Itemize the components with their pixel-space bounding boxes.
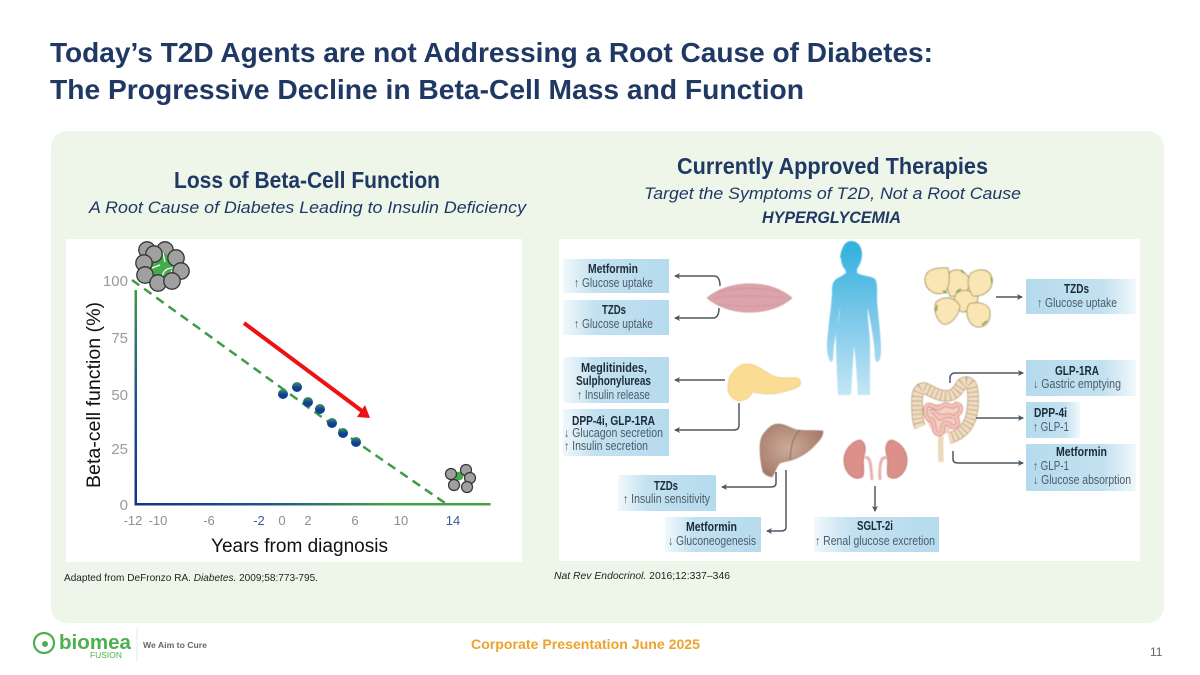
logo: biomea fusion: We Aim to Cure xyxy=(143,641,208,650)
y tick labels: 50 xyxy=(111,387,128,404)
y axis title: Beta-cell function (%) xyxy=(84,302,105,488)
y tick labels: 0 xyxy=(120,497,128,514)
box: metformin liver: Metformin xyxy=(686,520,737,534)
logo: biomea fusion: biomea xyxy=(59,631,132,654)
footer text: Corporate Presentation June 2025 xyxy=(471,636,700,652)
icon: pancreas xyxy=(728,364,801,401)
arrow: gut to GLP-1RA xyxy=(950,373,1023,383)
box: TZDs muscle xyxy=(563,300,669,335)
box: GLP-1RA gut xyxy=(1026,360,1136,396)
y axis xyxy=(134,290,137,505)
panel: content background xyxy=(51,131,1164,623)
chart: beta-cell function decline xyxy=(66,239,522,562)
box: metformin muscle xyxy=(563,259,669,293)
box: DPP-4i gut: ↑ GLP-1 xyxy=(1033,420,1069,434)
box: SGLT-2i xyxy=(814,517,939,552)
hyperglycemia label: HYPERGLYCEMIA xyxy=(762,208,901,227)
arrow: pancreas to DPP-4i xyxy=(675,403,739,430)
icon: kidneys xyxy=(844,440,907,480)
x axis title: Years from diagnosis xyxy=(211,536,388,557)
box: metformin gut: ↓ Glucose absorption xyxy=(1033,473,1131,487)
box: TZDs fat: TZDs xyxy=(1064,282,1089,296)
x tick labels xyxy=(124,513,460,528)
box: metformin liver: ↓ Gluconeogenesis xyxy=(668,534,756,548)
logo: biomea fusion xyxy=(34,628,208,662)
icon: muscle xyxy=(707,284,792,312)
box: SGLT-2i: ↑ Renal glucose excretion xyxy=(815,534,935,548)
y tick labels: 25 xyxy=(111,441,128,458)
box: metformin gut: Metformin xyxy=(1056,445,1107,459)
arrow: gut to DPP-4i xyxy=(976,417,1023,419)
box: meglitinides: Sulphonylureas xyxy=(576,374,651,388)
left heading: Loss of Beta-Cell Function xyxy=(174,167,440,193)
citation: DeFronzo: Adapted from DeFronzo RA. Diabetes. 2009;58:773-795. xyxy=(64,572,318,584)
box: meglitinides: Meglitinides, xyxy=(581,361,647,375)
box: TZDs liver xyxy=(618,475,716,511)
title xyxy=(50,37,933,105)
box: metformin liver xyxy=(665,517,761,552)
box: DPP-4i GLP-1RA: ↑ Insulin secretion xyxy=(564,439,648,453)
box: TZDs muscle: ↑ Glucose uptake xyxy=(574,317,653,331)
x tick labels: -10 xyxy=(149,513,167,528)
box: metformin muscle: Metformin xyxy=(588,262,638,276)
dashed decline line xyxy=(132,280,445,503)
arrow: gut to metformin xyxy=(953,451,1023,463)
x tick labels: 6 xyxy=(351,513,359,528)
data points xyxy=(278,382,361,447)
box: TZDs liver: ↑ Insulin sensitivity xyxy=(623,492,711,506)
arrow: liver to metformin xyxy=(767,470,786,531)
box: TZDs muscle: TZDs xyxy=(602,303,626,317)
x axis xyxy=(134,503,490,506)
x tick labels: -12 xyxy=(124,513,142,528)
red arrow xyxy=(244,323,370,418)
box: TZDs liver: TZDs xyxy=(654,479,678,493)
x tick labels: -2 xyxy=(253,513,265,528)
left subheading: A Root Cause of Diabetes Leading to Insulin Deficiency xyxy=(88,198,528,217)
box: TZDs fat: ↑ Glucose uptake xyxy=(1037,296,1117,310)
arrow: kidney to SGLT-2i xyxy=(874,486,876,511)
title: Today’s T2D Agents are not Addressing a Root Cause of Diabetes: xyxy=(50,37,933,68)
box: meglitinides: ↑ Insulin release xyxy=(577,388,650,402)
box: metformin muscle: ↑ Glucose uptake xyxy=(574,276,653,290)
box: metformin gut xyxy=(1026,444,1136,491)
x tick labels: 2 xyxy=(304,513,312,528)
y tick labels xyxy=(103,273,128,514)
x tick labels: 0 xyxy=(278,513,286,528)
x tick labels: 14 xyxy=(446,513,460,528)
diagram: therapies by organ xyxy=(559,239,1140,561)
icon: liver xyxy=(760,424,823,477)
logo: biomea fusion: FUSION xyxy=(90,651,122,660)
page number: 11 xyxy=(1150,645,1163,659)
box: GLP-1RA gut: ↓ Gastric emptying xyxy=(1033,377,1121,391)
box: DPP-4i gut: DPP-4i xyxy=(1034,406,1067,420)
icon: human body xyxy=(827,241,881,395)
box: TZDs fat xyxy=(1026,279,1136,314)
box: DPP-4i GLP-1RA xyxy=(563,409,669,456)
box: DPP-4i GLP-1RA: ↓ Glucagon secretion xyxy=(564,426,663,440)
citation: Nat Rev Endocrinol: Nat Rev Endocrinol. 2016;12:337–346 xyxy=(554,570,730,582)
box: DPP-4i gut xyxy=(1026,402,1080,438)
box: SGLT-2i: SGLT-2i xyxy=(857,519,893,533)
x tick labels: 10 xyxy=(394,513,408,528)
box: metformin gut: ↑ GLP-1 xyxy=(1033,459,1069,473)
arrow: fat to TZDs xyxy=(996,296,1022,298)
arrow: pancreas to meglitinides xyxy=(675,379,725,381)
icon: fat cells xyxy=(925,268,992,327)
y tick labels: 75 xyxy=(111,330,128,347)
icon: depleted islet cluster xyxy=(446,464,476,492)
box: meglitinides xyxy=(563,357,669,403)
right subheading: Target the Symptoms of T2D, Not a Root Cause xyxy=(644,184,1021,203)
arrow: muscle to TZDs xyxy=(675,308,719,318)
right heading: Currently Approved Therapies xyxy=(677,153,988,179)
icon: healthy islet cluster xyxy=(136,242,189,291)
icon: intestines xyxy=(917,382,973,462)
x tick labels: -6 xyxy=(203,513,215,528)
title: The Progressive Decline in Beta-Cell Mass and Function xyxy=(50,74,804,105)
box: GLP-1RA gut: GLP-1RA xyxy=(1055,364,1099,378)
arrow: liver to TZDs xyxy=(722,472,776,487)
arrow: muscle to metformin xyxy=(675,276,720,286)
y tick labels: 100 xyxy=(103,273,128,290)
box: DPP-4i GLP-1RA: DPP-4i, GLP-1RA xyxy=(572,414,655,428)
